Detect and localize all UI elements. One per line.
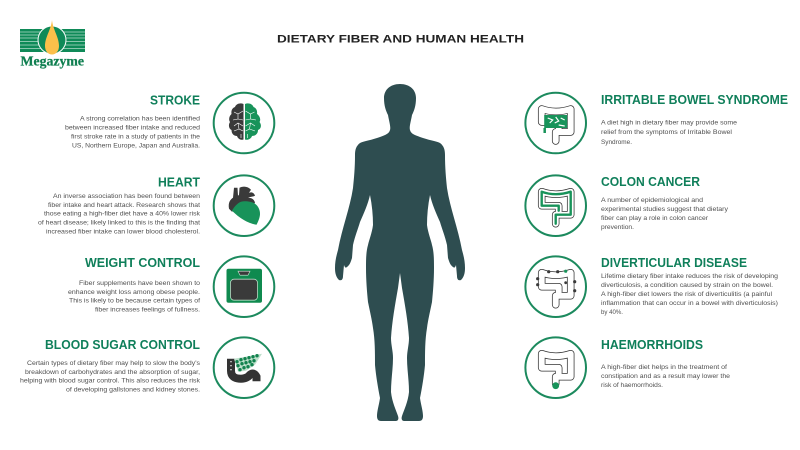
text: diverticular disease: A high-fiber diet lowers the risk of diverticulitis (a painful [601, 291, 772, 298]
text: stroke: A strong correlation has been identified [80, 116, 201, 122]
text: haemorrhoids: A high-fiber diet helps in the treatment of [601, 364, 727, 371]
text: weight control [68, 280, 201, 314]
icon: colon with haemorrhoids [525, 337, 586, 398]
text: diverticular disease: Lifetime dietary fiber intake reduces the risk of developing [601, 273, 779, 280]
text: diverticular disease: diverticulosis, a condition caused by strain on the bowel. [601, 282, 773, 289]
logo: Megazyme [20, 20, 85, 70]
panel: haemorrhoids [525, 337, 731, 398]
panel: weight control [68, 255, 274, 317]
panel: irritable bowel syndrome [525, 92, 788, 153]
text: heart: those eating a high-fiber diet have a 40% lower risk [44, 210, 201, 218]
icon: heart [214, 175, 274, 236]
icon: irritated bowel [525, 93, 586, 153]
heading: colon cancer: COLON CANCER [601, 174, 700, 189]
heading: blood sugar control: BLOOD SUGAR CONTROL [45, 337, 200, 352]
icon: weighing scale [214, 256, 274, 317]
heading: stroke: STROKE [150, 92, 200, 108]
text: stroke: between increased fiber intake and reduced [65, 124, 201, 132]
icon: colon [525, 175, 586, 236]
text: weight control: This is likely to be because certain types of [69, 298, 200, 304]
text: weight control: enhance weight loss among obese people. [68, 289, 200, 296]
heading: irritable bowel syndrome: IRRITABLE BOWEL SYNDROME [601, 92, 788, 107]
panel: stroke [65, 92, 274, 153]
text: colon cancer: fiber can play a role in colon cancer [601, 215, 708, 222]
text: colon cancer: experimental studies suggest that dietary [601, 206, 729, 213]
text: blood sugar control [20, 360, 201, 394]
text: heart: of heart disease; likely linked to this is the finding that [38, 220, 200, 226]
text: colon cancer: A number of epidemiological and [601, 197, 704, 204]
text: blood sugar control: helping with blood sugar control. This also reduces the risk [20, 378, 201, 384]
text: diverticular disease: inflammation that can occur in a bowel with diverticulosis) [601, 300, 778, 307]
text: weight control: Fiber supplements have been shown to [79, 280, 201, 287]
icon: brain [214, 93, 274, 153]
text: heart: fiber intake and heart attack. Research shows that [48, 202, 200, 209]
logo: Megazyme: Megazyme [20, 54, 84, 70]
text: colon cancer: prevention. [601, 224, 634, 231]
text: haemorrhoids: constipation and as a result may lower the [601, 373, 731, 380]
text: haemorrhoids [601, 364, 731, 389]
text: diverticular disease [601, 273, 779, 316]
heading: haemorrhoids: HAEMORRHOIDS [601, 337, 703, 352]
panel: heart [38, 174, 274, 236]
human body silhouette [335, 84, 465, 421]
panel: diverticular disease [525, 255, 779, 317]
text: heart [38, 193, 201, 236]
icon: colon with diverticula [525, 256, 586, 317]
text: colon cancer [601, 197, 729, 231]
text: stroke: US, Northern Europe, Japan and Australia. [72, 142, 200, 150]
heading: heart: HEART [158, 174, 200, 190]
title: DIETARY FIBER AND HUMAN HEALTH [277, 34, 524, 46]
text: blood sugar control: of developing gallstones and kidney stones. [66, 386, 200, 394]
text: stroke [65, 116, 201, 150]
text: heart: An inverse association has been found between [53, 193, 201, 200]
text: irritable bowel syndrome: A diet high in dietary fiber may provide some [601, 120, 738, 126]
panel: colon cancer [525, 174, 729, 236]
text: blood sugar control: Certain types of dietary fiber may help to slow the body's [27, 360, 200, 367]
text: blood sugar control: breakdown of carbohydrates and the absorption of sugar, [25, 369, 200, 376]
text: irritable bowel syndrome: Syndrome. [601, 139, 632, 146]
text: irritable bowel syndrome [601, 120, 738, 146]
heading: weight control: WEIGHT CONTROL [85, 255, 200, 270]
heading: diverticular disease: DIVERTICULAR DISEASE [601, 255, 747, 270]
text: stroke: first stroke rate in a study of patients in the [71, 134, 201, 140]
icon: liver and digestive tract [214, 337, 274, 398]
text: weight control: fiber increases feelings of fullness. [95, 306, 200, 314]
text: heart: increased fiber intake can lower blood cholesterol. [46, 228, 200, 236]
panel: blood sugar control [20, 337, 274, 398]
text: diverticular disease: by 40%. [601, 309, 623, 316]
text: irritable bowel syndrome: relief from the symptoms of Irritable Bowel [601, 129, 732, 136]
text: haemorrhoids: risk of haemorrhoids. [601, 382, 663, 389]
